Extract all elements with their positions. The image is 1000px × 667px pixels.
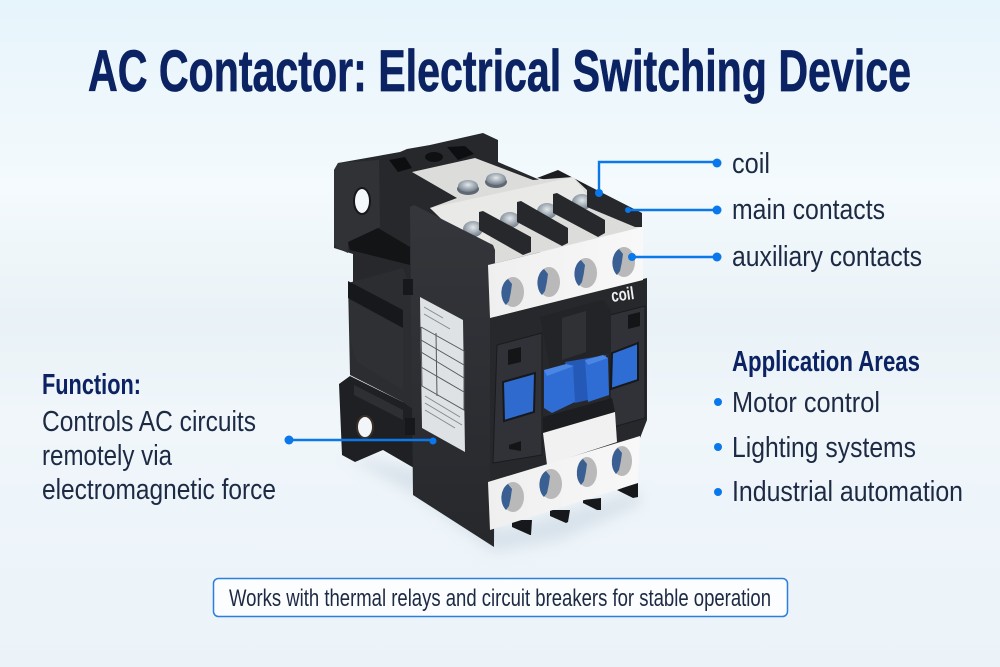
text block: application areas: [714, 346, 963, 508]
centre actuator base: [543, 398, 615, 433]
"coil" device marking: coil: [610, 283, 635, 306]
footer note box: [214, 578, 788, 616]
upper terminal holes: [501, 247, 635, 307]
text block: function: Controls AC circuits: [42, 406, 256, 438]
right blue window frame: [610, 306, 645, 428]
top white terminal deck: [412, 158, 642, 265]
lower terminal feet: [512, 482, 638, 535]
rear body block: [348, 268, 414, 470]
callout: auxiliary contacts: auxiliary contacts: [732, 241, 922, 273]
text block: application areas: Application Areas: [732, 346, 920, 378]
terminal barriers: [479, 185, 642, 255]
front-left side panel: [410, 205, 495, 547]
callout: main contacts: [625, 194, 885, 226]
front black face: [490, 278, 647, 482]
centre actuator top: [540, 300, 611, 370]
left mounting flange: [334, 160, 380, 253]
white front tab: [543, 412, 617, 465]
text block: application areas: Lighting systems: [732, 432, 916, 464]
text block: function: [42, 369, 276, 506]
callout: auxiliary contacts: [628, 241, 922, 273]
callout: coil: coil: [732, 148, 770, 180]
text block: function: electromagnetic force: [42, 474, 276, 506]
flange floor recess: [348, 228, 410, 265]
AC contactor device: [334, 133, 647, 552]
small side clips: [403, 279, 413, 295]
top screws: [457, 173, 592, 237]
rear terminal strip: [537, 170, 587, 195]
text block: function: remotely via: [42, 440, 173, 472]
centre blue blocks: [544, 355, 609, 413]
text block: application areas: Industrial automation: [732, 476, 963, 508]
upper mounting hole: [354, 188, 370, 214]
callout: coil: [595, 148, 770, 197]
upper terminal plate: [488, 227, 643, 318]
top clip details: [389, 157, 412, 172]
lower mounting flange: [339, 376, 414, 468]
ground shadow: [345, 455, 640, 552]
small square recesses: [508, 312, 640, 451]
lower terminal plate: [488, 436, 640, 530]
lower terminal holes: [501, 446, 632, 512]
spec label: [420, 297, 465, 452]
text block: function: Function:: [42, 369, 141, 401]
footer note box: Works with thermal relays and circuit breakers for stable operation: [229, 585, 771, 612]
left blue panel: [503, 373, 535, 421]
callout: main contacts: main contacts: [732, 194, 885, 226]
text block: application areas: Motor control: [732, 387, 880, 419]
lower mounting hole: [357, 416, 373, 438]
callout: function: [284, 436, 436, 444]
right blue panel: [611, 343, 638, 389]
left blue window frame: [493, 333, 542, 463]
rear top housing: [334, 133, 540, 300]
